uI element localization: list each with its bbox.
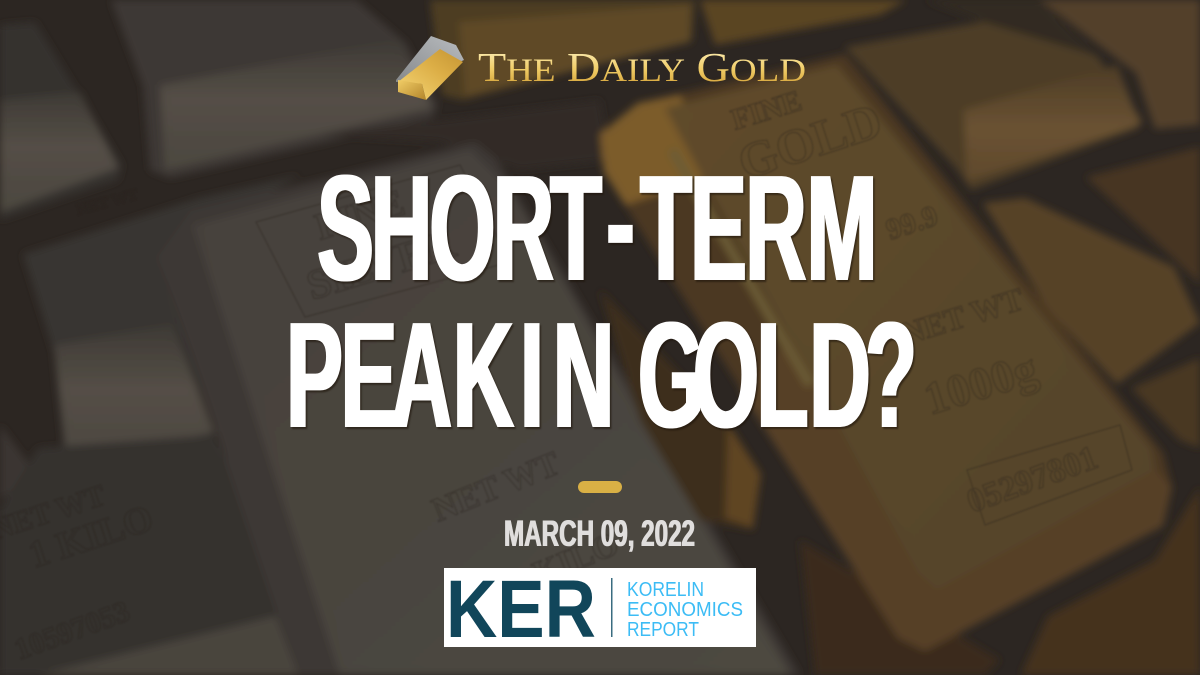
title line 2: PEAK IN GOLD?: [286, 290, 917, 459]
gold bar, main: [600, 54, 1172, 651]
KER logo: [444, 564, 756, 655]
embossed bar lettering: 1 KILO: [24, 497, 158, 577]
KER wordmark: [627, 579, 743, 641]
embossed bar lettering: FINE: [727, 84, 806, 137]
embossed bar lettering: NET WT: [427, 445, 565, 529]
KER wordmark: ECONOMICS: [627, 599, 743, 621]
silver bar, centre: [157, 142, 800, 675]
logo background: [444, 568, 756, 647]
embossed bar lettering: 1 KILO: [504, 525, 624, 602]
embossed bar lettering: 10597053: [10, 595, 134, 667]
icon: gold bar: [396, 36, 464, 100]
silver bars, left: [0, 22, 122, 220]
embossed bar lettering: GOLD: [731, 92, 888, 190]
KER wordmark: KORELIN: [627, 579, 704, 601]
date: MARCH 09, 2022: [504, 513, 695, 554]
title: [286, 136, 917, 459]
logo: The Daily Gold: [396, 36, 806, 100]
divider: [611, 578, 612, 637]
KER letters: KER: [446, 564, 596, 655]
embossed bar lettering: NET WT: [75, 186, 140, 219]
embossed bar lettering: SILVER: [301, 221, 461, 310]
wordmark: THE DAILY GOLD: [478, 44, 806, 90]
embossed bar lettering: 05297801: [962, 439, 1103, 521]
embossed bar lettering: 1000g: [918, 342, 1043, 425]
embossed bar lettering: FINE: [310, 182, 409, 249]
embossed bar lettering: 99.9: [882, 199, 942, 247]
accent pill: [578, 481, 622, 493]
embossed bar lettering: NET WT: [897, 280, 1028, 352]
gold bars, top: [700, 0, 906, 45]
KER wordmark: REPORT: [627, 619, 699, 641]
title line 1: SHORT-TERM: [317, 136, 877, 312]
